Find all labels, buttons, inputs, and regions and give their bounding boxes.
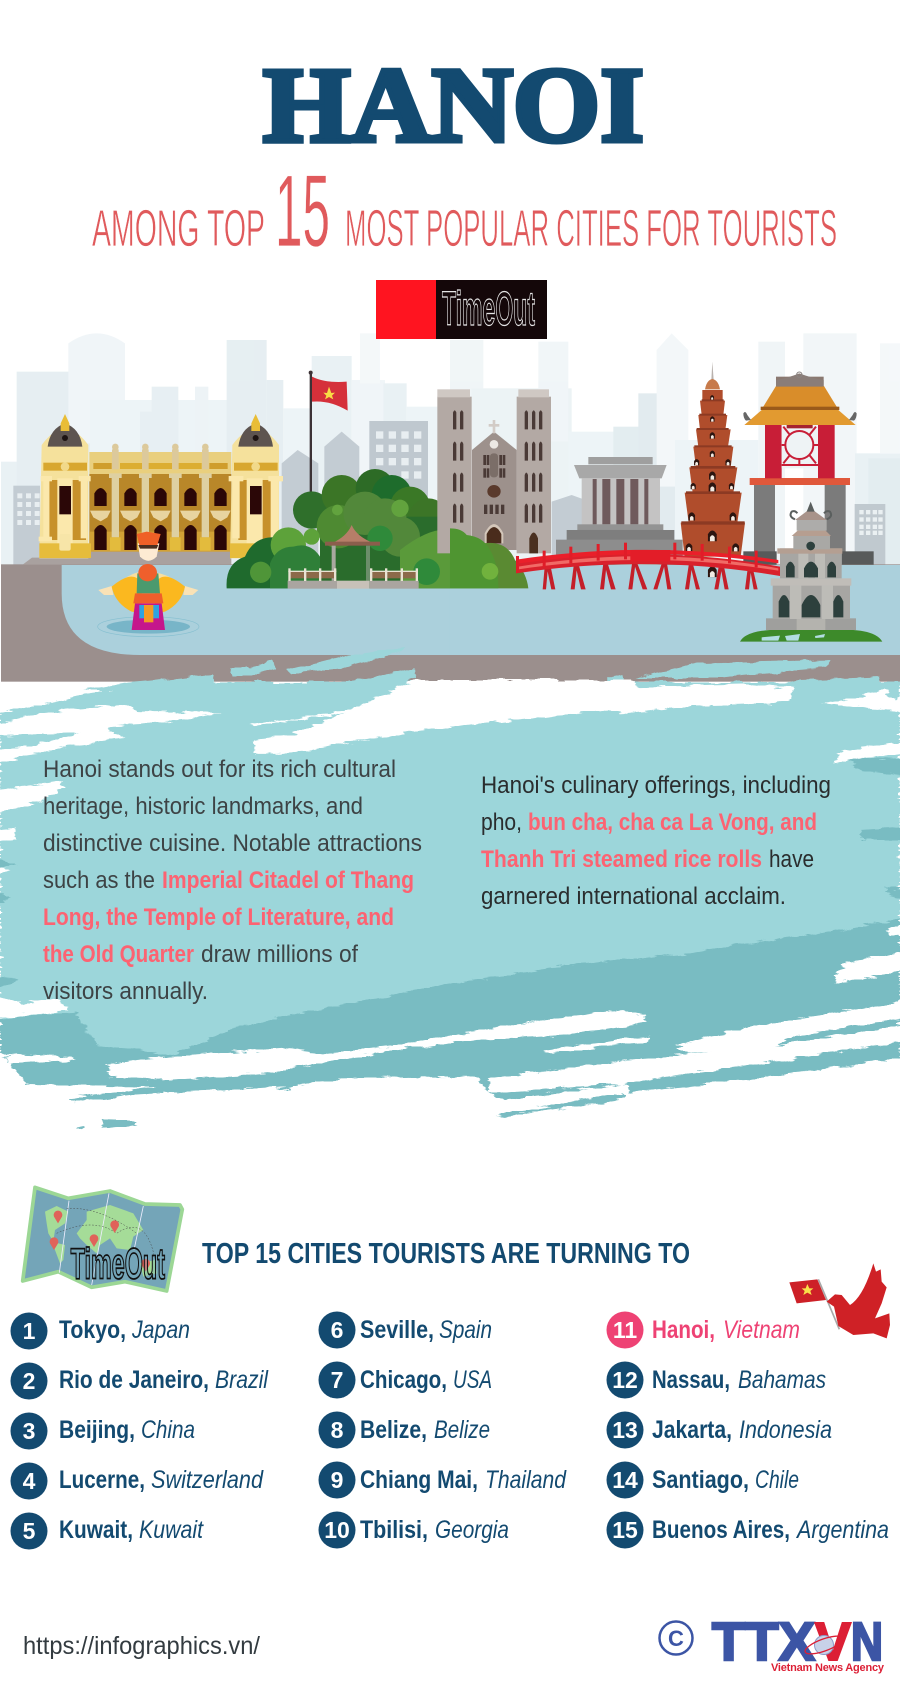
lake bbox=[450, 565, 900, 655]
left half of the skyline bbox=[1, 333, 451, 682]
rank 8: Belize, bbox=[360, 1416, 427, 1444]
Time Out logo badge bbox=[376, 280, 547, 339]
white streak: lower small bbox=[6, 1037, 649, 1063]
lower brush fragments bbox=[75, 1078, 626, 1129]
white streak: lower main bbox=[106, 1010, 646, 1080]
rank 2 bbox=[10, 1362, 269, 1400]
rank 2: Brazil bbox=[215, 1366, 269, 1394]
streaks on the road bbox=[83, 647, 880, 690]
ground bbox=[450, 564, 900, 682]
ranking list bbox=[10, 1312, 889, 1550]
right paragraph: Thanh Tri steamed rice rolls bbox=[481, 846, 762, 873]
ground bbox=[1, 564, 451, 682]
tran quoc pagoda bbox=[681, 362, 745, 577]
rank 7: Chicago, bbox=[360, 1366, 447, 1394]
rank 6: Seville, bbox=[360, 1316, 434, 1344]
source url: https://infographics.vn/ bbox=[23, 1632, 260, 1660]
subtitle bbox=[92, 154, 837, 268]
left paragraph: such as the bbox=[43, 867, 155, 894]
right pavilion bbox=[229, 414, 283, 558]
rank 8: Belize bbox=[434, 1416, 490, 1444]
right half of the skyline bbox=[437, 333, 900, 682]
flag on pole bbox=[309, 371, 348, 493]
section heading: TOP 15 CITIES TOURISTS ARE TURNING TO bbox=[202, 1238, 690, 1270]
rank 1: Tokyo, bbox=[59, 1316, 126, 1344]
copyright mark bbox=[660, 1622, 692, 1654]
icon: red dove with flag bbox=[789, 1263, 890, 1338]
background buildings bbox=[1, 333, 450, 565]
lake bbox=[62, 565, 450, 655]
rank 15: 15 bbox=[612, 1517, 638, 1543]
rank 9 bbox=[318, 1462, 567, 1498]
turtle tower bbox=[740, 502, 882, 642]
white streak: lower right bbox=[677, 1000, 900, 1053]
rank 3: 3 bbox=[23, 1418, 35, 1444]
rank 4: Switzerland bbox=[151, 1466, 264, 1494]
white streak: lowest right bbox=[488, 1023, 900, 1093]
subtitle: 15 bbox=[275, 154, 330, 268]
white patches: right edge bbox=[832, 742, 900, 983]
rank 13 bbox=[606, 1412, 832, 1448]
left paragraph: heritage, historic landmarks, and bbox=[43, 793, 363, 820]
rank 10: 10 bbox=[324, 1517, 350, 1543]
background buildings bbox=[450, 333, 900, 566]
right paragraph bbox=[481, 772, 831, 910]
rank 5: 5 bbox=[23, 1518, 36, 1544]
icon: world map with Time Out bbox=[23, 1187, 182, 1291]
left paragraph: Hanoi stands out for its rich cultural bbox=[43, 756, 396, 783]
left paragraph: the Old Quarter bbox=[43, 941, 194, 968]
mausoleum bbox=[556, 457, 683, 556]
rank 9: Chiang Mai, bbox=[360, 1466, 478, 1494]
rank 1 bbox=[10, 1312, 190, 1350]
rank 12 bbox=[606, 1362, 826, 1398]
rank 10: Georgia bbox=[435, 1516, 509, 1544]
the huc bridge bbox=[516, 543, 780, 589]
rank 8 bbox=[318, 1412, 490, 1448]
left trees at bridge end bbox=[450, 528, 528, 588]
right paragraph: bun cha, cha ca La Vong, and bbox=[528, 809, 817, 836]
rank 7: 7 bbox=[331, 1367, 343, 1393]
left paragraph: distinctive cuisine. Notable attractions bbox=[43, 830, 422, 857]
subtitle: AMONG TOP bbox=[92, 200, 265, 258]
rank 15: Buenos Aires, bbox=[652, 1516, 790, 1544]
rank 8: 8 bbox=[331, 1417, 344, 1443]
light teal brush base bbox=[0, 682, 900, 1070]
TTXVN logo: Vietnam News Agency bbox=[771, 1662, 885, 1674]
rank 1: Japan bbox=[131, 1316, 190, 1344]
rank 11 highlighted bbox=[606, 1312, 800, 1348]
rank 10 bbox=[318, 1512, 509, 1548]
title: HANOI bbox=[263, 47, 644, 165]
rank 5: Kuwait bbox=[139, 1516, 204, 1544]
rank 10: Tbilisi, bbox=[360, 1516, 428, 1544]
rank 4: Lucerne, bbox=[59, 1466, 145, 1494]
rank 9: Thailand bbox=[485, 1466, 567, 1494]
left paragraph: visitors annually. bbox=[43, 978, 208, 1005]
rank 15 bbox=[606, 1512, 889, 1548]
right paragraph: Hanoi's culinary offerings, including bbox=[481, 772, 831, 799]
rank 9: 9 bbox=[331, 1467, 343, 1493]
rank 14: Chile bbox=[755, 1466, 799, 1494]
white streak: top right bbox=[821, 690, 900, 712]
left pavilion bbox=[39, 414, 91, 558]
TTXVN logo: TTX bbox=[712, 1612, 815, 1672]
icon: world map with Time Out: TimeOut bbox=[71, 1241, 165, 1289]
rank 13: 13 bbox=[612, 1417, 638, 1443]
rank 7 bbox=[318, 1362, 492, 1398]
white patches: left edge bbox=[0, 780, 69, 1018]
white streak: upper left bbox=[0, 705, 224, 735]
rank 11 highlighted: 11 bbox=[613, 1317, 637, 1343]
rank 2: 2 bbox=[23, 1368, 35, 1394]
rank 4 bbox=[10, 1462, 264, 1500]
rank 5: Kuwait, bbox=[59, 1516, 133, 1544]
white streak: left bbox=[0, 725, 123, 762]
rank 7: USA bbox=[453, 1366, 492, 1394]
copyright mark: C bbox=[668, 1626, 684, 1651]
dark teal lower stroke bbox=[0, 918, 900, 1103]
left paragraph bbox=[43, 756, 422, 1005]
rank 12: 12 bbox=[612, 1367, 638, 1393]
rank 6: Spain bbox=[439, 1316, 492, 1344]
white streak: small upper bbox=[250, 710, 357, 727]
dark patches: right and left edge bbox=[0, 757, 900, 993]
rank 11 highlighted: Hanoi, bbox=[652, 1316, 715, 1344]
rank 11 highlighted: Vietnam bbox=[723, 1316, 800, 1344]
right paragraph: have bbox=[769, 846, 814, 873]
opera house bbox=[23, 414, 283, 565]
rank 6 bbox=[318, 1312, 492, 1348]
TTXVN logo bbox=[712, 1612, 885, 1674]
water puppet dancer bbox=[98, 532, 199, 637]
rank 14: 14 bbox=[612, 1467, 638, 1493]
white streak: upper main bbox=[253, 680, 795, 753]
Time Out logo badge: TimeOut bbox=[442, 283, 535, 336]
red gate with tiled roof bbox=[743, 372, 874, 565]
rank 12: Nassau, bbox=[652, 1366, 730, 1394]
rank 13: Indonesia bbox=[739, 1416, 832, 1444]
rank 1: 1 bbox=[23, 1318, 36, 1344]
rank 14: Santiago, bbox=[652, 1466, 749, 1494]
rank 3: Beijing, bbox=[59, 1416, 135, 1444]
tree grove and pavilion bbox=[227, 469, 450, 589]
left paragraph: Imperial Citadel of Thang bbox=[162, 867, 414, 894]
rank 12: Bahamas bbox=[738, 1366, 826, 1394]
brush wash panel bbox=[0, 680, 900, 1129]
TTXVN logo: N bbox=[851, 1612, 883, 1672]
rank 14 bbox=[606, 1462, 799, 1498]
left paragraph: Long, the Temple of Literature, and bbox=[43, 904, 394, 931]
rank 3 bbox=[10, 1412, 195, 1450]
left paragraph: draw millions of bbox=[201, 941, 358, 968]
right paragraph: garnered international acclaim. bbox=[481, 883, 786, 910]
right paragraph: pho, bbox=[481, 809, 522, 836]
rank 13: Jakarta, bbox=[652, 1416, 732, 1444]
cathedral bbox=[437, 389, 551, 553]
rank 5 bbox=[10, 1512, 204, 1550]
rank 2: Rio de Janeiro, bbox=[59, 1366, 209, 1394]
illustration: Hanoi skyline bbox=[1, 333, 900, 682]
rank 3: China bbox=[141, 1416, 195, 1444]
rank 4: 4 bbox=[23, 1468, 36, 1494]
TTXVN logo: V bbox=[815, 1612, 851, 1672]
rank 6: 6 bbox=[331, 1317, 343, 1343]
